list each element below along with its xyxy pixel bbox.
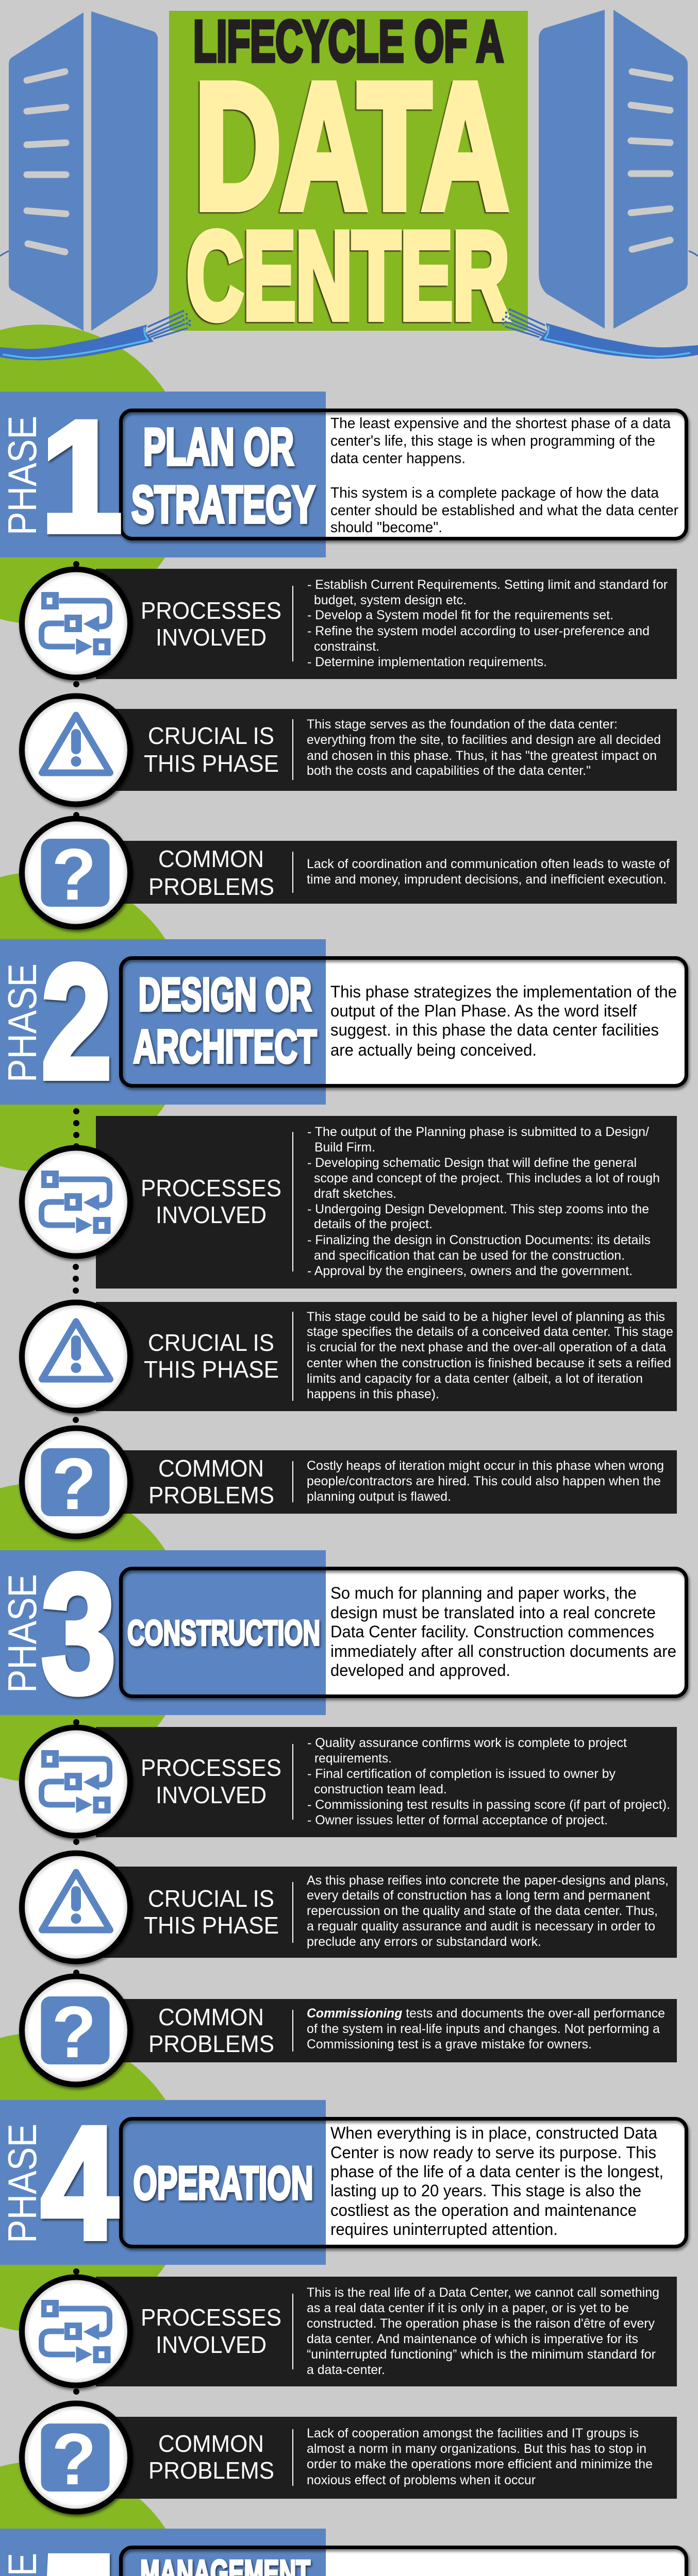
- label: [141, 2304, 281, 2358]
- icon: question: [22, 2403, 130, 2512]
- body text: every details of construction has a long term and permanent: [307, 1888, 650, 1903]
- phase description: developed and approved.: [330, 1661, 510, 1680]
- icon: right cable: [502, 308, 698, 359]
- label: PROBLEMS: [148, 2030, 274, 2057]
- body text: [307, 1459, 664, 1504]
- phase description: Data Center facility. Construction commences: [330, 1622, 654, 1641]
- panel: phase 4 problems: [22, 2403, 677, 2512]
- icon: question: ?: [52, 1443, 96, 1525]
- phase description: This system is a complete package of how the data: [330, 485, 659, 501]
- body text: [307, 1873, 669, 1949]
- body text: Lack of coordination and communication often leads to waste of: [307, 857, 670, 871]
- label: PROCESSES: [141, 597, 281, 624]
- decorative green circles: [0, 325, 190, 2576]
- label: THIS PHASE: [144, 750, 279, 777]
- phase description: suggest. in this phase the data center facilities: [330, 1021, 659, 1039]
- body text: time and money, imprudent decisions, and inefficient execution.: [307, 872, 667, 887]
- body text: preclude any errors or substandard work.: [307, 1935, 541, 1949]
- body text: Costly heaps of iteration might occur in this phase when wrong: [307, 1459, 664, 1473]
- body text: As this phase reifies into concrete the paper-designs and plans,: [307, 1873, 669, 1888]
- body text: [307, 717, 661, 778]
- body text: Commissioning test is a grave mistake for owners.: [307, 2037, 592, 2052]
- body text: and chosen in this phase. Thus, it has "the greatest impact on: [307, 749, 657, 763]
- body text: [307, 1736, 670, 1827]
- phase title: ARCHITECT: [133, 1021, 317, 1073]
- phase number: 1: [40, 387, 123, 566]
- phase description: center should be established and what the data center: [330, 502, 678, 519]
- body text: This is the real life of a Data Center, we cannot call something: [307, 2285, 659, 2300]
- body text: requirements.: [314, 1751, 392, 1766]
- body text: noxious effect of problems when it occur: [307, 2473, 536, 2487]
- body text: order to make the operations more efficient and minimize the: [307, 2457, 653, 2471]
- panel: phase 2 crucial: [22, 1302, 677, 1411]
- phase description: are actually being conceived.: [330, 1041, 537, 1059]
- body text: people/contractors are hired. This could also happen when the: [307, 1474, 661, 1488]
- label: COMMON: [158, 1455, 264, 1482]
- label: [144, 1885, 279, 1939]
- label: THIS PHASE: [144, 1356, 279, 1383]
- body text: is crucial for the next phase and the over-all operation of a data: [307, 1340, 666, 1354]
- body text: - Undergoing Design Development. This step zooms into the: [307, 1202, 649, 1216]
- label: [141, 597, 281, 651]
- icon: warning: [22, 1302, 130, 1411]
- body text: [307, 2006, 665, 2052]
- panel: phase 2 problems: [22, 1428, 677, 1536]
- label: PROCESSES: [141, 1754, 281, 1781]
- panel: phase 3 processes: [22, 1727, 677, 1837]
- icon: question: ?: [52, 1991, 96, 2073]
- phase label: PHASE: [0, 963, 45, 1082]
- label: INVOLVED: [156, 624, 267, 651]
- body text: construction team lead.: [314, 1782, 447, 1797]
- label: CRUCIAL IS: [148, 722, 274, 749]
- body text: both the costs and capabilities of the data center.": [307, 764, 591, 778]
- body text: constructed. The operation phase is the raison d'être of every: [307, 2316, 655, 2331]
- label: PROCESSES: [141, 1175, 281, 1201]
- panel: phase 2 processes: [22, 1116, 677, 1289]
- body text: of the system in real-life inputs and changes. Not performing a: [307, 2022, 660, 2036]
- phase description: phase of the life of a data center is the longest,: [330, 2162, 663, 2181]
- body text: data center. And maintenance of which is imperative for its: [307, 2332, 638, 2346]
- panel: phase 3 problems: [22, 1976, 677, 2084]
- body text: a data-center.: [307, 2363, 385, 2377]
- body text: scope and concept of the project. This includes a lot of rough: [314, 1171, 660, 1185]
- header: [0, 9, 698, 360]
- body text: - Finalizing the design in Construction Documents: its details: [307, 1233, 651, 1247]
- body text: - Refine the system model according to user-preference and: [307, 624, 650, 638]
- body text: a regualr quality assurance and audit is necessary in order to: [307, 1919, 655, 1934]
- phase 3 connector dots: [73, 1719, 79, 1976]
- phase description: [330, 982, 677, 1059]
- body text: planning output is flawed.: [307, 1489, 451, 1504]
- phase title: [131, 418, 315, 534]
- phase description: Center is now ready to serve its purpose. This: [330, 2143, 656, 2162]
- panel: phase 3 banner: [0, 1539, 687, 1728]
- label: COMMON: [158, 2430, 264, 2457]
- title: data: DATA: [195, 47, 508, 246]
- panel: phase 1 banner: [0, 387, 687, 566]
- phase description: The least expensive and the shortest phase of a data: [330, 415, 671, 432]
- phase description: costliest as the operation and maintenance: [330, 2201, 637, 2219]
- panel: phase 3 crucial: [22, 1853, 677, 1961]
- panel: phase 2 banner: [0, 931, 687, 1112]
- icon: processes: [22, 2277, 130, 2385]
- label: PROBLEMS: [148, 2457, 274, 2484]
- phase label: PHASE: [0, 2124, 45, 2243]
- phase 4 connector dots: [73, 2268, 79, 2395]
- icon: question: [22, 1976, 130, 2084]
- body text: This stage could be said to be a higher level of planning as this: [307, 1310, 665, 1324]
- body text: - Determine implementation requirements.: [307, 655, 547, 669]
- body text: [307, 1125, 660, 1278]
- label: COMMON: [158, 845, 264, 872]
- phase number: 3: [41, 1539, 116, 1728]
- body text: Lack of cooperation amongst the facilities and IT groups is: [307, 2426, 639, 2441]
- phase description: output of the Plan Phase. As the word itself: [330, 1002, 637, 1020]
- body text: - Establish Current Requirements. Setting limit and standard for: [307, 578, 668, 592]
- body text: [307, 578, 668, 669]
- label: [141, 1175, 281, 1228]
- body text: [307, 2285, 659, 2377]
- body text: everything from the site, to facilities and design are all decided: [307, 733, 661, 747]
- label: COMMON: [158, 2004, 264, 2030]
- label: [148, 2430, 274, 2484]
- icon: warning: [22, 1853, 130, 1961]
- phase description: data center happens.: [330, 450, 466, 467]
- panel: phase 4 processes: [22, 2277, 677, 2386]
- icon: question: [22, 819, 130, 927]
- phase description: should "become".: [330, 519, 442, 536]
- phase title: CONSTRUCTION: [127, 1613, 320, 1653]
- label: [148, 1455, 274, 1509]
- title: lifecycle of a: LIFECYCLE OF A: [193, 9, 504, 74]
- body text: details of the project.: [314, 1217, 433, 1231]
- body text: budget, system design etc.: [314, 593, 467, 607]
- body text: - Final certification of completion is issued to owner by: [307, 1767, 616, 1781]
- label: [148, 845, 274, 900]
- body text: [307, 2426, 653, 2487]
- phase label: PHASE: [0, 1574, 45, 1693]
- body text: and specification that can be used for the construction.: [314, 1248, 625, 1263]
- body text: repercussion on the quality and state of the data center. Thus,: [307, 1904, 658, 1918]
- panel: phase 1 problems: [22, 819, 677, 927]
- body text: stage specifies the details of a conceived data center. This stage: [307, 1325, 673, 1339]
- body text: - Developing schematic Design that will define the general: [307, 1156, 637, 1170]
- label: THIS PHASE: [144, 1912, 279, 1939]
- body text: happens in this phase).: [307, 1387, 439, 1401]
- icon: left cable: [0, 310, 191, 360]
- phase description: [330, 2124, 663, 2239]
- label: INVOLVED: [156, 2331, 267, 2358]
- body text: Commissioning tests and documents the over-all performance: [307, 2006, 665, 2021]
- title panel: [169, 11, 528, 331]
- body text: - Commissioning test results in passing score (if part of project).: [307, 1798, 670, 1812]
- phase title: OPERATION: [133, 2158, 313, 2209]
- label: INVOLVED: [156, 1782, 267, 1808]
- body text: [307, 857, 670, 887]
- phase description: This phase strategizes the implementation of the: [330, 982, 677, 1001]
- phase description: design must be translated into a real concrete: [330, 1603, 656, 1622]
- phase description: So much for planning and paper works, the: [330, 1584, 637, 1602]
- body text: as a real data center if it is only in a paper, or is yet to be: [307, 2301, 629, 2315]
- label: [148, 2004, 274, 2057]
- label: [144, 722, 279, 777]
- label: CRUCIAL IS: [148, 1329, 274, 1356]
- phase description: [330, 1584, 676, 1680]
- label: [144, 1329, 279, 1383]
- phase 2 connector dots: [73, 1108, 79, 1423]
- phase description: requires uninterrupted attention.: [330, 2220, 558, 2239]
- body text: - The output of the Planning phase is submitted to a Design/: [307, 1125, 649, 1139]
- phase title: PLAN OR: [143, 418, 294, 476]
- icon: warning: [22, 696, 130, 804]
- phase title: STRATEGY: [131, 476, 315, 534]
- phase description: center's life, this stage is when programming of the: [330, 433, 655, 449]
- body text: This stage serves as the foundation of the data center:: [307, 717, 618, 732]
- body text: - Approval by the engineers, owners and the government.: [307, 1264, 633, 1278]
- icon: question: ?: [52, 834, 96, 916]
- icon: question: ?: [52, 2418, 96, 2500]
- title: center: CENTER: [187, 207, 509, 345]
- phase label: PHASE: [0, 416, 45, 535]
- label: INVOLVED: [156, 1201, 267, 1228]
- phase 1 connector dots: [73, 561, 79, 818]
- icon: processes: [22, 569, 130, 677]
- icon: left server: [0, 11, 158, 331]
- body text: [307, 1310, 673, 1401]
- icon: processes: [22, 1148, 130, 1256]
- phase title: [133, 969, 317, 1073]
- body text: almost a norm in many organizations. But this has to stop in: [307, 2442, 646, 2456]
- icon: processes: [22, 1727, 130, 1836]
- phase title: DESIGN OR: [138, 969, 311, 1021]
- body text: constrainst.: [314, 639, 379, 654]
- body text: - Owner issues letter of formal acceptance of project.: [307, 1813, 608, 1827]
- body text: “uninterrupted functioning” which is the minimum standard for: [307, 2347, 656, 2362]
- phase description: immediately after all construction documents are: [330, 1642, 676, 1660]
- body text: draft sketches.: [314, 1187, 396, 1201]
- phase number: 2: [41, 931, 112, 1112]
- phase number: 4: [41, 2093, 119, 2272]
- panel: phase 1 crucial: [22, 696, 677, 804]
- icon: right server: [539, 10, 698, 329]
- body text: Build Firm.: [314, 1140, 375, 1155]
- label: [141, 1754, 281, 1808]
- icon: question: [22, 1428, 130, 1536]
- body text: - Quality assurance confirms work is complete to project: [307, 1736, 627, 1750]
- phase description: lasting up to 20 years. This stage is also the: [330, 2181, 641, 2200]
- body text: center when the construction is finished because it sets a reified: [307, 1356, 671, 1370]
- label: CRUCIAL IS: [148, 1885, 274, 1912]
- body text: - Develop a System model fit for the requirements set.: [307, 608, 613, 622]
- panel: phase 1 processes: [22, 569, 677, 679]
- label: PROBLEMS: [148, 873, 274, 900]
- phase description: When everything is in place, constructed Data: [330, 2124, 657, 2142]
- panel: phase 4 banner: [0, 2093, 687, 2272]
- panel: phase 5 banner: [0, 2520, 687, 2576]
- label: PROBLEMS: [148, 1482, 274, 1509]
- phase description: [330, 415, 678, 536]
- label: PROCESSES: [141, 2304, 281, 2331]
- body text: limits and capacity for a data center (albeit, a lot of iteration: [307, 1371, 643, 1386]
